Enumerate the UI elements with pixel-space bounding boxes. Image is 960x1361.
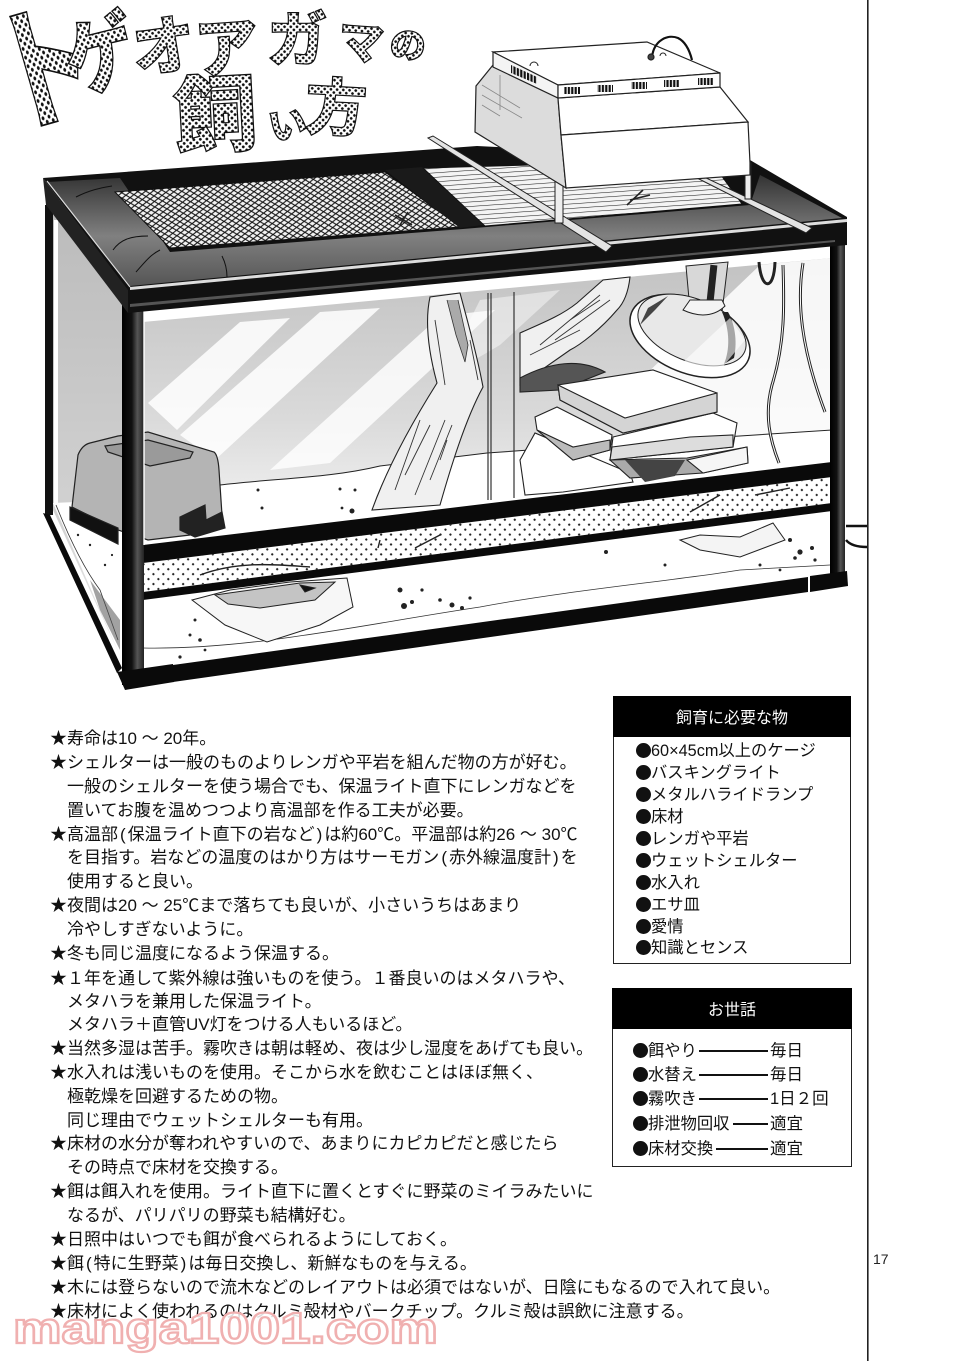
panel: required items: ウェットシェルター xyxy=(651,852,798,870)
front oval rock xyxy=(192,578,353,642)
substrate specks xyxy=(77,488,817,659)
panel: required items: 愛情 xyxy=(651,918,684,936)
lid frame xyxy=(43,146,847,313)
title: トゲオアガマの飼い方: の xyxy=(388,16,428,70)
text block: care notes: メタハラを兼用した保温ライト。 xyxy=(67,992,322,1011)
panel heading: お世話 xyxy=(708,1002,756,1019)
text block: care notes: を目指す。岩などの温度のはかり方はサーモガン(赤外線温度計)を xyxy=(67,848,578,867)
panel: daily care: 床材交換 xyxy=(648,1140,713,1158)
text block: care notes xyxy=(50,729,780,1321)
panel heading: 飼育に必要な物 xyxy=(676,710,788,727)
back right rock xyxy=(680,523,785,557)
lower front: dotted band and rails xyxy=(143,462,832,682)
title: トゲオアガマの飼い方: 飼 xyxy=(170,47,260,172)
water shelter xyxy=(70,432,225,544)
panel: daily care: 水替え xyxy=(648,1066,697,1084)
text block: care notes: ★餌は餌入れを使用。ライト直下に置くとすぐに野菜のミイラみたいに xyxy=(50,1182,594,1201)
panel: daily care: 適宜 xyxy=(770,1140,803,1158)
driftwood xyxy=(372,277,630,510)
text block: care notes: 使用すると良い。 xyxy=(67,872,203,891)
vents xyxy=(511,65,714,94)
panel: daily care: 餌やり xyxy=(648,1042,697,1060)
terrarium: glass tank with habitat xyxy=(43,37,867,690)
text block: care notes: 置いてお腹を温めつつより高温部を作る工夫が必要。 xyxy=(67,801,474,820)
panel: required items: 60×45cm以上のケージ xyxy=(651,742,816,760)
gecko sketch xyxy=(395,190,650,225)
text block: care notes: ★日照中はいつでも餌が食べられるようにしておく。 xyxy=(50,1230,457,1249)
cables xyxy=(759,262,825,463)
panel: daily care: 適宜 xyxy=(770,1115,803,1133)
lid centre bar xyxy=(385,167,490,228)
text block: care notes: ★木には登らないので流木などのレイアウトは必須ではないが、日陰にもなるので入れて良い。 xyxy=(50,1278,780,1297)
panel: daily care: 毎日 xyxy=(770,1066,803,1084)
panel: required items: 水入れ xyxy=(651,874,700,892)
title: トゲオアガマの飼い方: 方 xyxy=(303,56,370,150)
substrate floor xyxy=(143,430,832,550)
text block: care notes: 極乾燥を回避するための物。 xyxy=(67,1087,288,1106)
panel: daily care xyxy=(612,988,852,1167)
text block: care notes: 冷やしすぎないように。 xyxy=(67,920,253,939)
posts and feet xyxy=(43,205,867,690)
mesh panel left xyxy=(115,172,460,248)
text block: care notes: ★寿命は10 ～ 20年。 xyxy=(50,729,216,748)
power cord xyxy=(652,37,692,60)
door track lines xyxy=(488,292,514,500)
text block: care notes: ★夜間は20 ～ 25℃まで落ちても良いが、小さいうちはあまり xyxy=(50,896,521,915)
title: トゲオアガマの飼い方: い xyxy=(264,91,311,152)
text block: care notes: メタハラ＋直管UV灯をつける人もいるほど。 xyxy=(67,1015,412,1034)
panel: required items xyxy=(613,696,851,964)
text block: care notes: その時点で床材を交換する。 xyxy=(67,1158,288,1177)
panel: daily care: 1日２回 xyxy=(770,1090,829,1108)
back and side glass xyxy=(53,205,832,660)
watermark: manga1001.com xyxy=(13,1304,438,1353)
text block: care notes: ★高温部(保温ライト直下の岩など)は約60℃。平温部は約26 ～ 30℃ xyxy=(50,825,578,844)
panel: required items: メタルハライドランプ xyxy=(651,786,813,804)
title: トゲオアガマの飼い方: マ xyxy=(336,6,387,75)
text block: care notes: 一般のシェルターを使う場合でも、保温ライト直下にレンガなどを xyxy=(67,777,576,796)
text block: care notes: ★当然多湿は苦手。霧吹きは朝は軽め、夜は少し湿度をあげても良い。 xyxy=(50,1039,593,1058)
panel: required items: レンガや平岩 xyxy=(651,830,749,848)
text block: care notes: 同じ理由でウェットシェルターも有用。 xyxy=(67,1111,373,1130)
title: トゲオアガマの飼い方 xyxy=(0,0,428,172)
panel: required items: バスキングライト xyxy=(651,764,781,782)
panel: daily care: 排泄物回収 xyxy=(648,1115,729,1133)
panel: daily care: 毎日 xyxy=(770,1042,803,1060)
text block: care notes: ★床材によく使われるのはクルミ殻材やバークチップ。クルミ殻は誤飲に注意する。 xyxy=(50,1302,694,1321)
dark gap under rocks xyxy=(625,460,685,482)
text block: care notes: ★１年を通して紫外線は強いものを使う。１番良いのはメタハラや、 xyxy=(50,969,575,988)
panel: required items: 知識とセンス xyxy=(651,939,748,957)
page border line xyxy=(867,0,869,1361)
text block: care notes: なるが、パリパリの野菜も結構好む。 xyxy=(67,1206,356,1225)
heat lamp xyxy=(618,262,762,394)
panel: required items: エサ皿 xyxy=(651,896,700,914)
page number: 17 xyxy=(873,1251,889,1267)
text block: care notes: ★シェルターは一般のものよりレンガや平岩を組んだ物の方が好む。 xyxy=(50,753,577,772)
panel heading xyxy=(613,696,851,737)
panel: daily care: 霧吹き xyxy=(648,1090,697,1108)
text block: care notes: ★水入れは浅いものを使用。そこから水を飲むことはほぼ無く、 xyxy=(50,1063,543,1082)
text block: care notes: ★餌(特に生野菜)は毎日交換し、新鮮なものを与える。 xyxy=(50,1254,477,1273)
lamp rails xyxy=(428,136,812,252)
metal halide lamp hood xyxy=(475,37,750,188)
text block: care notes: ★床材の水分が奪われやすいので、あまりにカピカピだと感じたら xyxy=(50,1134,558,1153)
panel heading xyxy=(612,988,852,1029)
panel: required items: 床材 xyxy=(651,808,684,826)
mesh panel right xyxy=(423,160,742,226)
stacked flat rocks xyxy=(520,370,748,495)
text block: care notes: ★冬も同じ温度になるよう保温する。 xyxy=(50,944,339,963)
